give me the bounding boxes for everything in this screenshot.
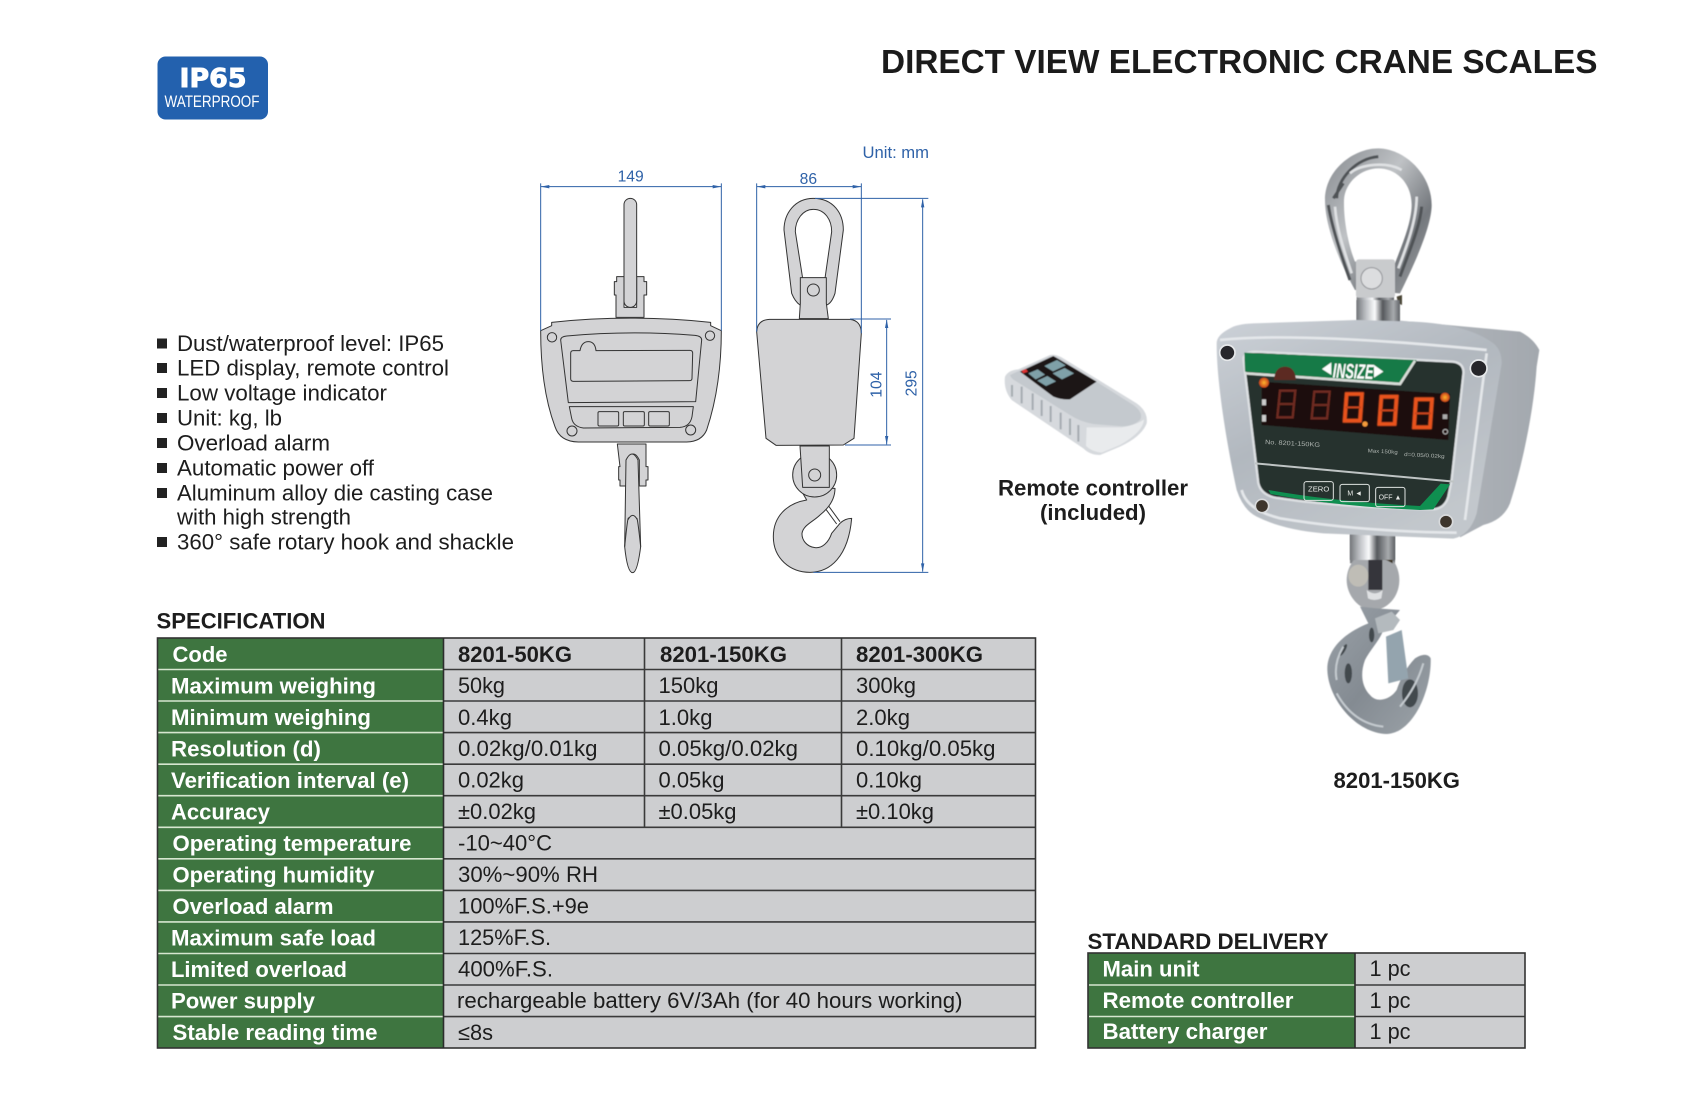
row: accuracy: ±0.05kg: [658, 799, 736, 824]
dimension: height 295: [813, 198, 928, 572]
specification table: [158, 638, 1036, 1048]
front view drawing: [541, 198, 721, 573]
brand band: [1244, 353, 1417, 384]
row: limited overload: [171, 956, 553, 982]
dimension: height 295: 295: [904, 370, 921, 396]
LED readout: [1259, 378, 1450, 434]
top shackle: [1325, 148, 1432, 322]
row: battery charger: [1102, 1019, 1410, 1044]
feature bullet list: LED display, remote control: [177, 356, 449, 380]
row: power supply: Power supply: [171, 988, 315, 1014]
side view drawing: [757, 198, 861, 572]
row: stable reading time: [172, 1020, 493, 1045]
row: code: 8201-150KG: [660, 642, 787, 667]
row: maximum weighing: 150kg: [658, 673, 718, 698]
unit note: Unit: mm: [862, 143, 929, 162]
feature bullet list: with high strength: [176, 504, 351, 530]
photo: crane scale: [1217, 148, 1539, 734]
row: accuracy: Accuracy: [171, 800, 270, 824]
row: minimum weighing: 2.0kg: [856, 705, 910, 730]
row: operating humidity: [172, 862, 598, 888]
dimension: width 149: [541, 169, 721, 331]
row: remote controller: Remote controller: [1102, 988, 1294, 1013]
dimension: depth 86: [757, 171, 861, 333]
row: battery charger: 1 pc: [1370, 1019, 1410, 1044]
row: maximum safe load: Maximum safe load: [171, 926, 376, 950]
row: maximum safe load: 125%F.S.: [458, 925, 551, 950]
row: stable reading time: ≤8s: [458, 1020, 493, 1045]
row: limited overload: Limited overload: [171, 957, 347, 982]
scale housing: [1217, 300, 1539, 560]
scale housing: d=0.05/0.02kg: [1404, 452, 1445, 460]
row: verification interval: [171, 768, 922, 793]
badge: IP65 waterproof: WATERPROOF: [164, 92, 260, 111]
feature bullet list: Dust/waterproof level: IP65: [177, 331, 444, 356]
row: code: 8201-50KG: [458, 642, 572, 667]
feature bullet list: Automatic power off: [177, 456, 375, 480]
row: resolution: [171, 736, 996, 762]
row: resolution: 0.02kg/0.01kg: [458, 736, 598, 761]
row: resolution: 0.05kg/0.02kg: [658, 736, 798, 761]
remote controller caption: (included): [1040, 500, 1146, 525]
standard delivery heading: STANDARD DELIVERY: [1088, 929, 1328, 954]
row: operating temperature: -10~40°C: [458, 830, 552, 856]
row: verification interval: 0.10kg: [856, 768, 922, 792]
technical drawing with dimensions: [541, 169, 928, 573]
remote controller caption: Remote controller: [998, 476, 1188, 500]
dimension: body height 104: 104: [869, 371, 886, 398]
row: main unit: Main unit: [1102, 956, 1200, 982]
badge: IP65 waterproof: [158, 56, 268, 120]
row: accuracy: [171, 799, 934, 824]
row: operating humidity: 30%~90% RH: [458, 862, 598, 887]
row: remote controller: 1 pc: [1370, 988, 1410, 1013]
photo: remote controller: [1005, 355, 1147, 455]
specification heading: SPECIFICATION: [156, 608, 326, 634]
row: operating temperature: [172, 830, 552, 856]
standard delivery table: [1088, 953, 1525, 1048]
row: resolution: 0.10kg/0.05kg: [856, 736, 996, 761]
scale housing: Max 150kg: [1368, 448, 1398, 456]
row: limited overload: 400%F.S.: [458, 956, 553, 982]
feature bullet list: Overload alarm: [177, 430, 330, 456]
dimension: body height 104: [845, 319, 891, 445]
row: stable reading time: Stable reading time: [172, 1020, 378, 1045]
row: maximum weighing: [171, 673, 916, 698]
row: verification interval: Verification interval (e): [171, 768, 409, 793]
keypad buttons: [1304, 482, 1405, 507]
row: power supply: [171, 988, 962, 1014]
model label: 8201-150KG: [1334, 768, 1460, 793]
row: operating humidity: Operating humidity: [172, 862, 375, 888]
row: verification interval: 0.05kg: [658, 768, 724, 792]
row: minimum weighing: Minimum weighing: [171, 705, 371, 730]
badge: IP65 waterproof: IP65: [180, 64, 246, 94]
row: code: Code: [172, 642, 228, 667]
row: battery charger: Battery charger: [1102, 1019, 1268, 1044]
feature bullet list: 360° safe rotary hook and shackle: [177, 530, 514, 554]
feature bullet list: Aluminum alloy die casting case: [177, 480, 493, 506]
green accent: [1268, 484, 1450, 510]
row: verification interval: 0.02kg: [458, 768, 524, 792]
row: accuracy: ±0.10kg: [856, 799, 934, 824]
row: operating temperature: Operating temperature: [172, 831, 412, 856]
row: minimum weighing: 1.0kg: [658, 705, 712, 730]
row: code: 8201-300KG: [856, 642, 983, 667]
row: overload alarm: 100%F.S.+9e: [458, 894, 589, 918]
row: maximum weighing: 300kg: [856, 673, 916, 698]
feature bullet list: Low voltage indicator: [177, 380, 387, 406]
row: maximum weighing: Maximum weighing: [171, 674, 376, 698]
scale housing: ZERO: [1308, 485, 1329, 494]
row: overload alarm: Overload alarm: [172, 894, 334, 919]
scale housing: No. 8201-150KG: [1265, 439, 1320, 449]
title: DIRECT VIEW ELECTRONIC CRANE SCALES: [881, 44, 1598, 81]
row: maximum weighing: 50kg: [458, 673, 505, 698]
row: power supply: rechargeable battery 6V/3Ah (for 40 hours working): [457, 988, 962, 1013]
row: main unit: [1102, 956, 1410, 982]
row: minimum weighing: [171, 705, 910, 730]
dimension: depth 86: 86: [800, 171, 817, 188]
brand band: INSIZE: [1332, 360, 1375, 384]
row: main unit: 1 pc: [1370, 956, 1410, 981]
row: resolution: Resolution (d): [171, 736, 321, 762]
row: remote controller: [1102, 988, 1410, 1013]
scale housing: M ◄: [1347, 490, 1362, 497]
scale housing: OFF ▲: [1379, 494, 1401, 501]
row: code: [172, 642, 983, 667]
feature bullet list: Unit: kg, lb: [177, 406, 282, 430]
row: overload alarm: [172, 894, 589, 919]
remote controller caption: [998, 476, 1188, 525]
row: minimum weighing: 0.4kg: [458, 705, 512, 730]
row: accuracy: ±0.02kg: [458, 799, 536, 824]
feature bullet list: [157, 331, 514, 554]
row: maximum safe load: [171, 925, 551, 950]
bottom hook: [1327, 533, 1431, 734]
dimension: width 149: 149: [618, 169, 644, 186]
case screws: [1220, 345, 1487, 528]
